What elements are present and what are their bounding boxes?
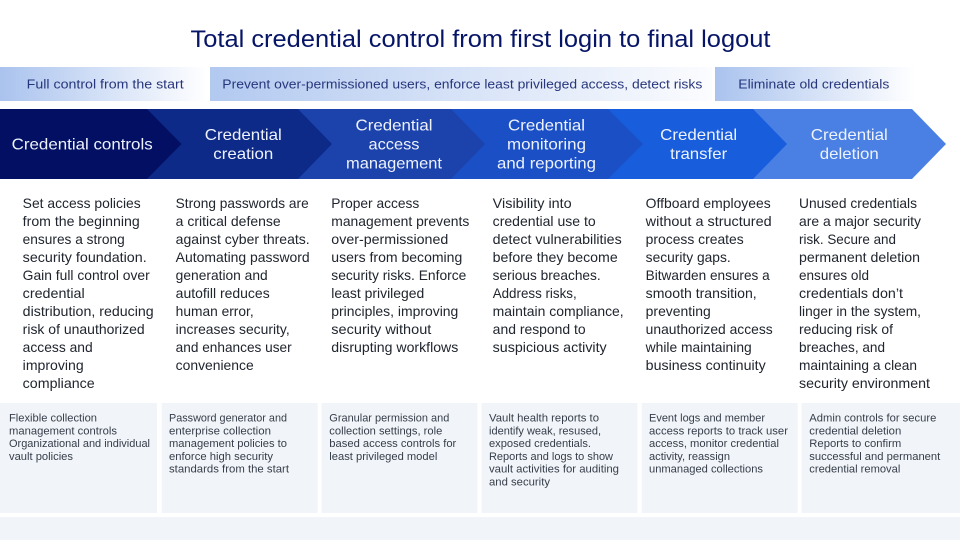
- title: Total credential control from first login to final logout: [190, 26, 771, 53]
- card: access management features: based access controls for: [329, 438, 457, 450]
- text block: credential monitoring and reporting: before they become: [493, 250, 618, 265]
- text block: credential transfer: process creates: [646, 232, 744, 247]
- bottom strip: [0, 517, 960, 540]
- chevron: credential creation: creation: [213, 146, 273, 163]
- card: monitoring and reporting features: Vault health reports to: [489, 412, 599, 424]
- text block: credential monitoring and reporting: suspicious activity: [493, 340, 607, 355]
- text block: credential transfer: business continuity: [646, 358, 766, 373]
- text block: credential transfer: unauthorized access: [646, 322, 773, 337]
- text block: credential deletion: Unused credentials: [799, 196, 917, 211]
- chevron: credential creation: Credential: [205, 127, 282, 144]
- text block: credential access management: management prevents: [331, 214, 470, 229]
- text block: credential monitoring and reporting: detect vulnerabilities: [493, 232, 622, 247]
- chevron: credential deletion: Credential: [811, 127, 888, 144]
- card: monitoring and reporting features: identify weak, resused,: [489, 425, 601, 437]
- card: credential transfer features: [642, 403, 798, 513]
- card: access management features: collection settings, role: [329, 425, 442, 437]
- card: credential controls features: management controls: [9, 425, 118, 437]
- text block: credential creation: human error,: [176, 304, 254, 319]
- band: full control: Full control from the start: [27, 76, 184, 92]
- text block: credential deletion: ensures old: [799, 268, 869, 283]
- stage bands: [0, 67, 915, 101]
- card: credential creation features: management policies to: [169, 438, 287, 450]
- chevron: credential monitoring and reporting: [451, 109, 643, 179]
- text block: credential monitoring and reporting: serious breaches.: [493, 268, 601, 283]
- band: eliminate old credentials: Eliminate old credentials: [738, 76, 890, 92]
- band: full control: [0, 67, 208, 101]
- card: access management features: Granular permission and: [329, 412, 449, 424]
- band: eliminate old credentials: [715, 67, 915, 101]
- card: credential creation features: Password generator and: [169, 412, 287, 424]
- chevron: credential controls: Credential controls: [12, 136, 153, 154]
- text block: credential deletion: reducing risk of: [799, 322, 893, 337]
- card: credential creation features: enforce high security: [169, 451, 274, 463]
- text block: credential controls: credential: [23, 286, 85, 301]
- card: access management features: least privileged model: [329, 451, 437, 463]
- text block: credential transfer: [645, 196, 773, 373]
- chevron: credential access management: Credential: [356, 118, 432, 134]
- chevron: credential deletion: deletion: [820, 146, 879, 163]
- text block: credential transfer: Offboard employees: [646, 196, 771, 211]
- card: credential controls features: Organizational and individual: [9, 438, 150, 450]
- text block: credential controls: Gain full control over: [23, 268, 150, 283]
- text block: credential controls: security foundation.: [23, 250, 147, 265]
- card: monitoring and reporting features: Reports and logs to show: [489, 451, 613, 463]
- chevron: credential access management: access: [368, 136, 420, 154]
- text block: credential deletion: risk. Secure and: [799, 232, 896, 247]
- text block: credential deletion: permanent deletion: [799, 250, 920, 265]
- text block: credential controls: from the beginning: [23, 214, 140, 229]
- text block: credential creation: generation and: [176, 268, 268, 283]
- chevron: credential transfer: [608, 109, 787, 179]
- card: credential creation features: standards from the start: [169, 464, 289, 476]
- chevron: credential monitoring and reporting: monitoring: [507, 136, 586, 154]
- card: credential controls features: vault policies: [9, 451, 73, 463]
- text block: credential monitoring and reporting: Address risks,: [493, 286, 577, 301]
- text block: credential transfer: smooth transition,: [646, 286, 757, 301]
- card: credential creation features: enterprise collection: [169, 425, 271, 437]
- text block: credential creation: increases security,: [176, 322, 290, 337]
- text block: credential controls: ensures a strong: [23, 232, 125, 247]
- feature cards: [0, 403, 960, 513]
- text block: credential controls: improving: [23, 358, 84, 373]
- text block: credential access management: Proper access: [331, 196, 420, 211]
- text block: credential transfer: security gaps.: [646, 250, 731, 265]
- card: credential deletion features: [802, 403, 960, 513]
- card: credential deletion features: Reports to confirm: [809, 438, 901, 450]
- text block: credential creation: Strong passwords are: [176, 196, 309, 211]
- text block: credential monitoring and reporting: Visibility into: [493, 196, 572, 211]
- text block: credential creation: convenience: [176, 358, 254, 373]
- chevron: credential creation: [147, 109, 332, 179]
- text block: credential controls: Set access policies: [23, 196, 141, 211]
- band: prevent over-permissioned users: Prevent over-permissioned users, enforce least privileged access, detect risks: [222, 76, 703, 92]
- card: credential transfer features: Event logs and member: [649, 412, 765, 424]
- text block: credential monitoring and reporting: maintain compliance,: [493, 304, 624, 319]
- card: credential controls features: [0, 403, 157, 513]
- text block: credential access management: least privileged: [331, 286, 424, 301]
- text block: credential transfer: preventing: [646, 304, 711, 319]
- card: monitoring and reporting features: exposed credentials.: [489, 438, 591, 450]
- text block: credential transfer: without a structured: [645, 214, 772, 229]
- text block: credential deletion: breaches, and: [799, 340, 885, 355]
- text block: credential access management: security risks. Enforce: [331, 268, 466, 283]
- text block: credential creation: Automating password: [176, 250, 310, 265]
- text block: credential creation: a critical defense: [176, 214, 281, 229]
- card: credential controls features: Flexible collection: [9, 412, 97, 424]
- text block: credential monitoring and reporting: and respond to: [493, 322, 586, 337]
- text block: credential deletion: security environment: [799, 376, 930, 391]
- chevron: credential transfer: Credential: [660, 127, 737, 144]
- text block: credential monitoring and reporting: credential use to: [493, 214, 596, 229]
- card: credential transfer features: access reports to track user: [649, 425, 788, 437]
- text block: credential access management: [331, 196, 470, 355]
- chevron: credential controls: [0, 109, 182, 179]
- text block: credential creation: [176, 196, 310, 373]
- text block: credential access management: security without: [331, 322, 432, 337]
- text block: credential controls: risk of unauthorized: [23, 322, 145, 337]
- text block: credential access management: disrupting workflows: [331, 340, 459, 355]
- text block: credential controls: distribution, reducing: [23, 304, 154, 319]
- card: credential deletion features: successful and permanent: [809, 451, 940, 463]
- card: credential deletion features: credential removal: [809, 464, 900, 476]
- chevron: credential monitoring and reporting: Credential: [508, 118, 585, 134]
- text block: credential access management: over-permissioned: [331, 232, 448, 247]
- text block: credential transfer: Bitwarden ensures a: [646, 268, 770, 283]
- text block: credential deletion: [799, 196, 930, 391]
- text block: credential deletion: credentials don’t: [799, 286, 903, 301]
- descriptions: [23, 196, 930, 391]
- card: credential deletion features: Admin controls for secure: [809, 412, 936, 424]
- text block: credential deletion: linger in the system,: [799, 304, 921, 319]
- text block: credential creation: autofill reduces: [176, 286, 270, 301]
- text block: credential monitoring and reporting: [493, 196, 624, 355]
- card: credential creation features: [162, 403, 318, 513]
- card: monitoring and reporting features: [482, 403, 638, 513]
- card: credential transfer features: activity, reassign: [649, 451, 730, 463]
- chevron: credential access management: [298, 109, 485, 179]
- card: credential transfer features: unmanaged collections: [649, 464, 763, 476]
- text block: credential creation: and enhances user: [176, 340, 292, 355]
- text block: credential deletion: maintaining a clean: [799, 358, 917, 373]
- chevron: credential access management: management: [346, 156, 443, 172]
- text block: credential controls: [23, 196, 154, 391]
- card: credential transfer features: access, monitor credential: [649, 438, 779, 450]
- text block: credential controls: compliance: [23, 376, 95, 391]
- text block: credential transfer: while maintaining: [645, 340, 752, 355]
- card: monitoring and reporting features: vault activities for auditing: [489, 464, 619, 476]
- chevron: credential transfer: transfer: [670, 146, 728, 163]
- band: prevent over-permissioned users: [210, 67, 712, 101]
- chevron: credential monitoring and reporting: and reporting: [497, 156, 596, 172]
- chevron: credential deletion: [753, 109, 946, 179]
- card: access management features: [322, 403, 478, 513]
- text block: credential controls: access and: [23, 340, 93, 355]
- text block: credential access management: principles, improving: [331, 304, 458, 319]
- card: monitoring and reporting features: and security: [489, 476, 551, 488]
- text block: credential deletion: are a major security: [799, 214, 921, 229]
- card: credential deletion features: credential deletion: [809, 425, 901, 437]
- text block: credential creation: against cyber threats.: [176, 232, 310, 247]
- text block: credential access management: users from becoming: [331, 250, 462, 265]
- chevron process row: [0, 109, 946, 179]
